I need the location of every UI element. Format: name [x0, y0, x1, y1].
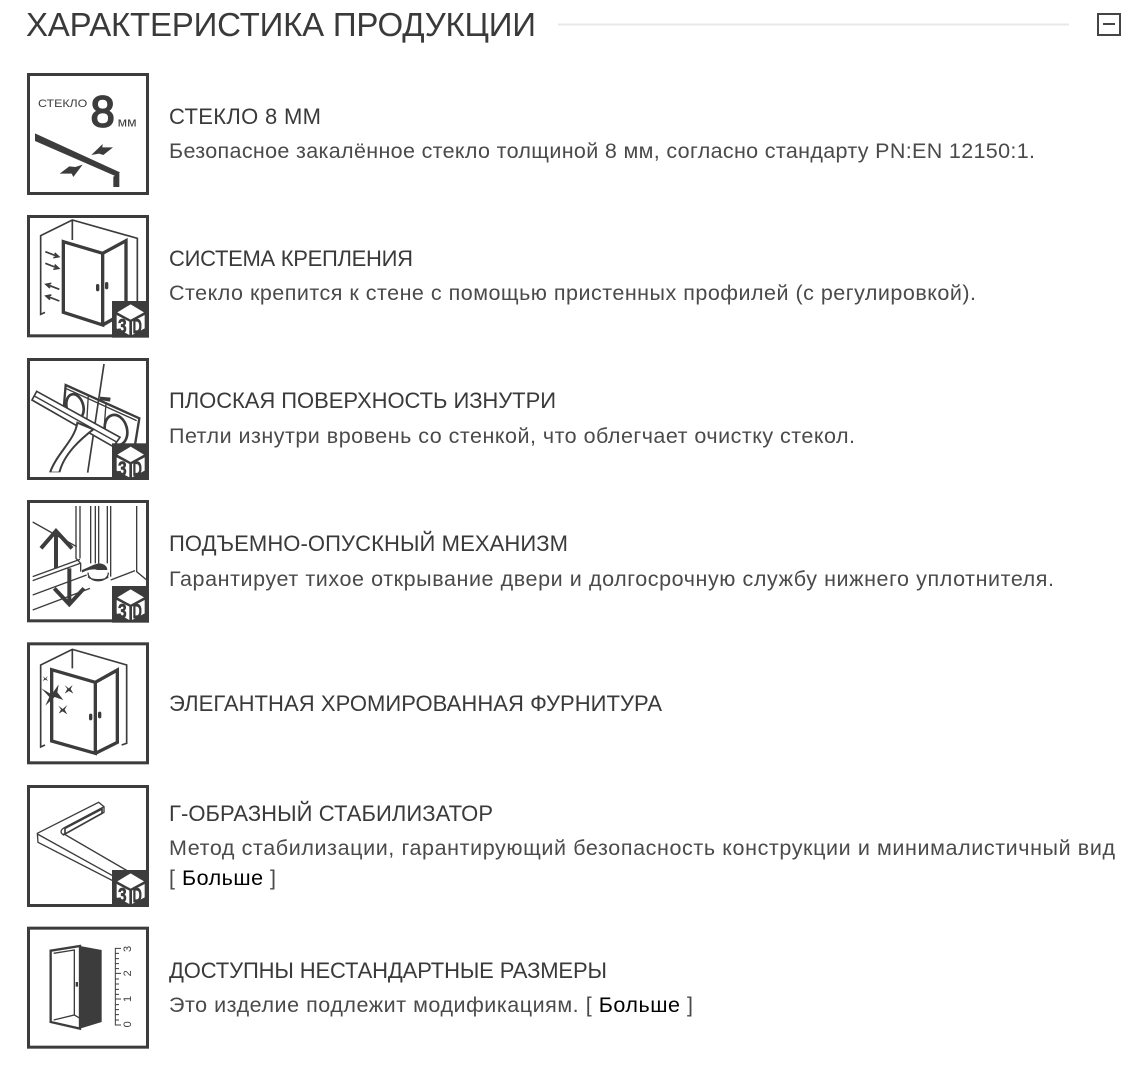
badge: 3D: 3 [118, 314, 127, 338]
description: Это изделие подлежит модификациям. [ Больше ] [169, 993, 693, 1017]
badge: 3D [112, 443, 149, 480]
icon: glass thickness: 8 [91, 88, 115, 136]
more link: [ Больше ] [169, 866, 276, 890]
badge: 3D: D [133, 883, 142, 907]
badge: 3D: 3 [118, 456, 127, 480]
heading: СТЕКЛО 8 ММ [169, 104, 321, 129]
icon: door with ruler [28, 928, 147, 1047]
icon: glass thickness: СТЕКЛО [38, 98, 88, 110]
icon: door lift arrows [28, 501, 147, 621]
description: Стекло крепится к стене с помощью пристенных профилей (с регулировкой). [169, 281, 976, 305]
icon: L-shaped bar [28, 786, 147, 905]
icon: door with ruler: 3 [122, 946, 134, 952]
heading: ЭЛЕГАНТНАЯ ХРОМИРОВАННАЯ ФУРНИТУРА [169, 691, 662, 716]
icon: door with ruler: 1 [122, 996, 134, 1002]
description: Безопасное закалённое стекло толщиной 8 мм, согласно стандарту PN:EN 12150:1. [169, 139, 1035, 163]
heading: ПЛОСКАЯ ПОВЕРХНОСТЬ ИЗНУТРИ [169, 388, 556, 413]
badge: 3D: D [133, 314, 142, 338]
badge: 3D: 3 [118, 599, 127, 623]
icon: door with ruler: 2 [122, 970, 134, 976]
feature: chrome fittings [28, 644, 662, 763]
badge: 3D [112, 301, 149, 338]
feature: glass 8 mm [28, 74, 1035, 193]
heading: СИСТЕМА КРЕПЛЕНИЯ [169, 246, 413, 271]
description: Метод стабилизации, гарантирующий безопасность конструкции и минималистичный вид [169, 836, 1115, 860]
heading: ПОДЪЕМНО-ОПУСКНЫЙ МЕХАНИЗМ [169, 531, 568, 556]
icon: glass thickness [28, 74, 147, 193]
icon: wall profiles [28, 216, 147, 336]
feature: lift-and-lower mechanism [28, 501, 1054, 623]
badge: 3D: D [133, 456, 142, 480]
badge: 3D: 3 [118, 883, 127, 907]
description: Петли изнутри вровень со стенкой, что облегчает очистку стекол. [169, 424, 855, 448]
collapse icon [1098, 14, 1120, 35]
feature: L-shaped stabilizer [28, 786, 1115, 907]
badge: 3D [112, 586, 149, 623]
icon: glass thickness: мм [118, 115, 137, 129]
feature: custom sizes [28, 928, 693, 1047]
description: Гарантирует тихое открывание двери и долгосрочную службу нижнего уплотнителя. [169, 567, 1054, 591]
title: ХАРАКТЕРИСТИКА ПРОДУКЦИИ [26, 6, 536, 43]
feature: flat inner surface [28, 359, 855, 480]
icon: sparkling enclosure [28, 644, 147, 763]
badge: 3D: D [133, 599, 142, 623]
heading: ДОСТУПНЫ НЕСТАНДАРТНЫЕ РАЗМЕРЫ [169, 958, 607, 983]
heading: Г-ОБРАЗНЫЙ СТАБИЛИЗАТОР [169, 801, 493, 826]
icon: squeegee on hinge [28, 359, 147, 478]
feature: mounting system [28, 216, 976, 338]
badge: 3D [112, 870, 149, 907]
icon: door with ruler: 0 [122, 1021, 134, 1027]
